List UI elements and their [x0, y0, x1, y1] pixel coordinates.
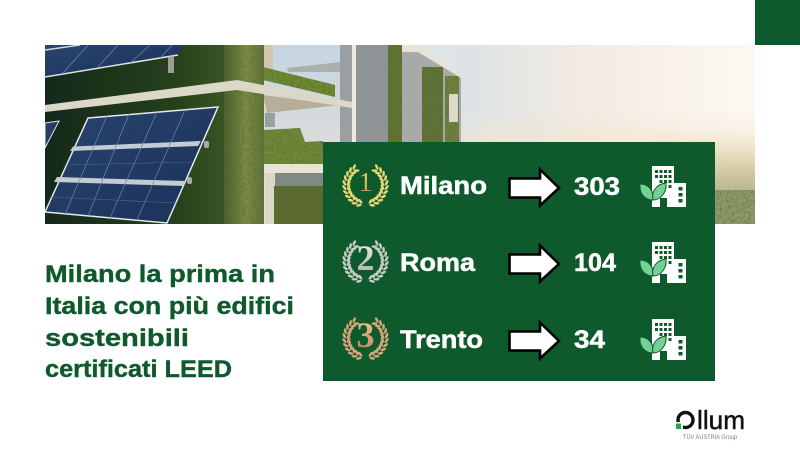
logo: Ollum TÜV Austria Group: llum	[697, 405, 745, 435]
icon: silver laurel medal	[341, 238, 390, 285]
row 3: Trento	[341, 315, 686, 362]
title: sostenibili	[45, 325, 189, 352]
city name: Trento	[400, 326, 483, 354]
row 2: Roma	[341, 238, 686, 285]
photo: green building with solar panels	[45, 45, 755, 224]
value: 303	[574, 173, 620, 201]
title: Milano la prima in	[45, 261, 275, 288]
arrow	[510, 322, 559, 358]
arrow	[510, 246, 559, 282]
city name: Milano	[400, 172, 487, 200]
icon: silver laurel medal: 2	[356, 238, 374, 278]
value: 104	[574, 249, 616, 277]
arrow	[510, 170, 559, 206]
icon: gold laurel medal	[341, 163, 390, 209]
row 1: Milano	[341, 163, 686, 209]
title	[45, 261, 294, 383]
icon: green building	[640, 319, 686, 360]
icon: bronze laurel medal: 3	[356, 315, 374, 355]
solar panel main	[45, 107, 218, 223]
corner accent square	[755, 0, 800, 45]
solar panel top	[45, 45, 184, 77]
icon: bronze laurel medal	[341, 315, 390, 362]
solar panel left small	[45, 121, 59, 148]
icon: gold laurel medal: 1	[359, 167, 372, 197]
logo: Ollum TÜV Austria Group	[675, 405, 745, 441]
icon: green building	[640, 166, 686, 207]
ranking panel	[323, 142, 715, 381]
city name: Roma	[400, 249, 476, 277]
icon: green building	[640, 242, 686, 283]
title: Italia con più edifici	[45, 293, 294, 320]
value: 34	[574, 326, 605, 354]
title: certificati LEED	[45, 356, 232, 383]
logo: Ollum TÜV Austria Group: TÜV AUSTRIA Group	[683, 434, 738, 441]
